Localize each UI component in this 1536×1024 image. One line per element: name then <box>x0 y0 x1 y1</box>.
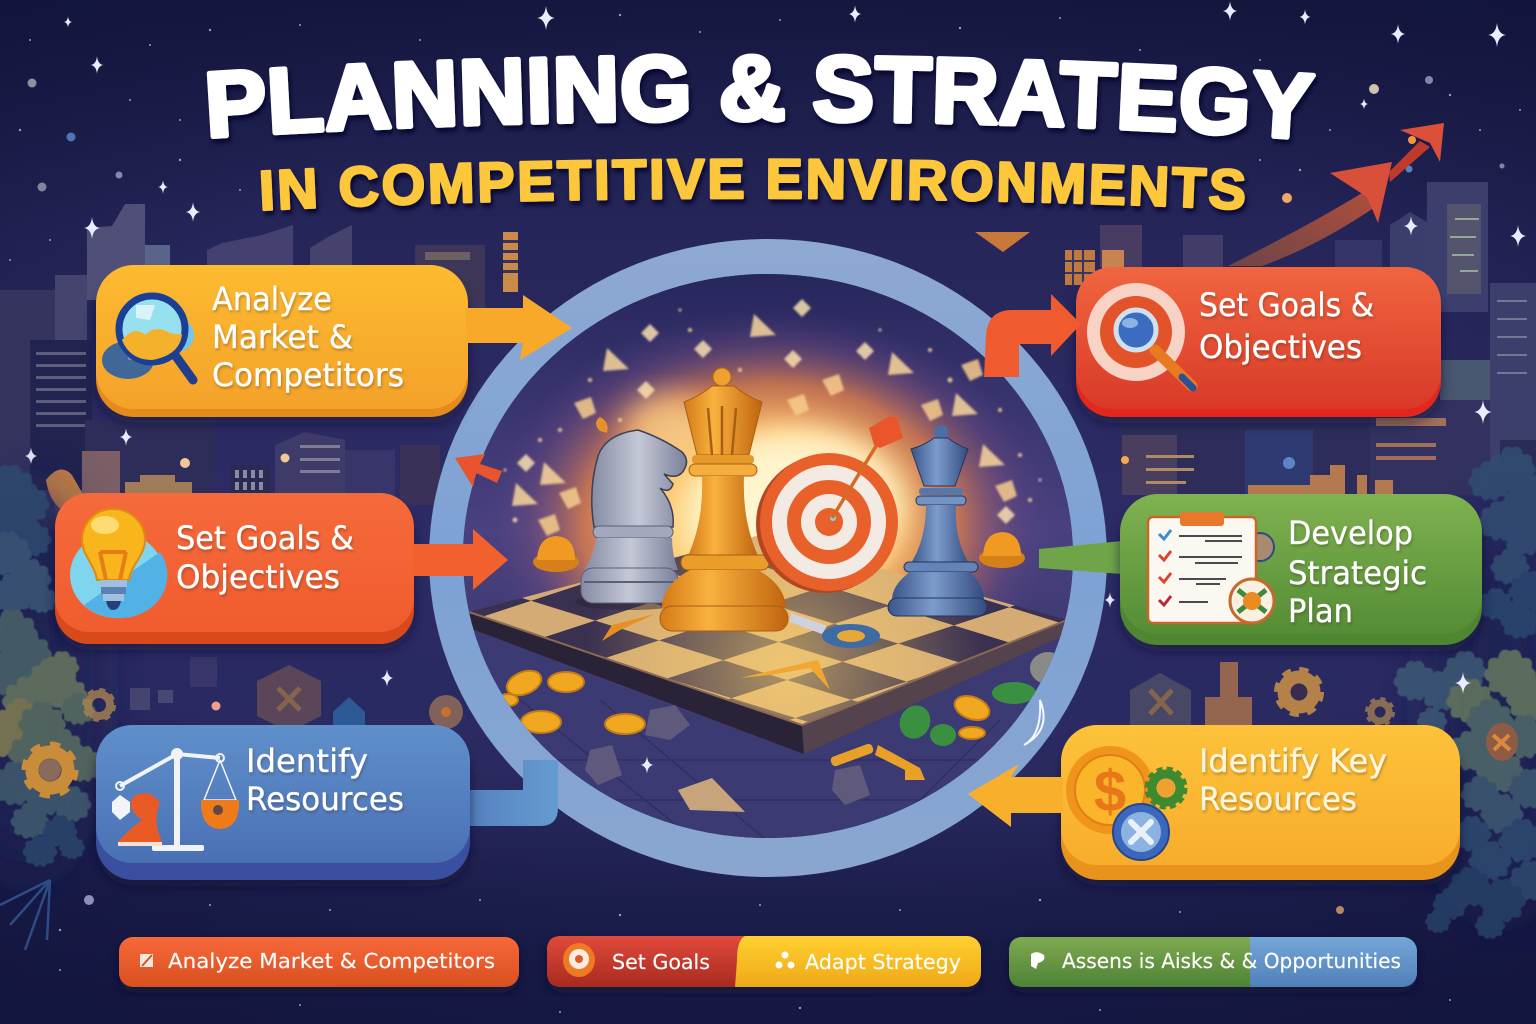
card text <box>1199 286 1374 366</box>
pill text: Assens is Aisks & & Opportunities <box>1062 949 1401 973</box>
board tokens <box>602 613 880 690</box>
foliage left <box>0 465 104 870</box>
icon: balance scales <box>112 748 239 851</box>
archery target <box>756 417 903 593</box>
card text: Plan <box>1288 592 1353 630</box>
title line one: PLANNING & STRATEGY <box>206 53 1318 145</box>
icon: coin with gear and badge: $ <box>1094 759 1126 824</box>
card text <box>176 519 354 596</box>
icon: magnifying glass <box>102 296 194 380</box>
floor below board <box>474 633 1059 838</box>
pill text: Analyze Market & Competitors <box>168 949 495 973</box>
card text <box>212 280 404 394</box>
icon: target with magnifier <box>1087 283 1193 388</box>
blue chess piece <box>888 425 987 616</box>
silver knight piece <box>575 417 687 610</box>
card text: Competitors <box>212 356 404 394</box>
card text: Set Goals & <box>176 519 354 557</box>
card text: Develop <box>1288 514 1413 552</box>
dome token right <box>979 532 1025 568</box>
card text: Resources <box>1199 780 1357 818</box>
card text: Resources <box>246 780 404 818</box>
decorative gears and hexagons <box>25 657 1518 795</box>
connector: plan to ring <box>1039 541 1122 574</box>
title <box>206 53 1318 216</box>
bottom pill: Assess Risks & Opportunities <box>1009 937 1417 987</box>
card text: Strategic <box>1288 554 1427 592</box>
star over right foliage <box>1455 672 1471 694</box>
gear left large <box>25 745 75 795</box>
card: Set Goals right <box>984 267 1441 417</box>
gear right small <box>1367 699 1393 725</box>
central scene <box>463 274 1073 838</box>
gear right large <box>1277 670 1321 714</box>
dome token left <box>533 536 579 572</box>
central ring <box>429 239 1107 877</box>
ring highlight swoosh <box>1024 700 1044 745</box>
gear left small <box>84 690 114 720</box>
backlight glow <box>510 322 1030 720</box>
card text <box>1199 742 1387 818</box>
icon: flag <box>1031 952 1044 969</box>
card text: Objectives <box>176 558 340 596</box>
pill text: Set Goals <box>612 950 710 974</box>
coins and debris <box>498 652 1066 812</box>
arrow: key resources to ring <box>968 764 1063 827</box>
icon: check box <box>140 954 153 967</box>
hexagon left <box>257 665 321 732</box>
pill text: Adapt Strategy <box>805 950 961 974</box>
hexagon right <box>1130 673 1191 735</box>
small red arrow on ring <box>455 454 502 487</box>
stepped block right <box>1205 662 1252 725</box>
card: Set Goals left <box>55 493 508 644</box>
city skyline <box>0 182 1536 720</box>
arrow: set goals to center <box>413 529 508 590</box>
card text: Analyze <box>212 280 332 318</box>
bottom pill: Set Goals and Adapt Strategy <box>547 936 981 987</box>
card text: Objectives <box>1199 328 1362 366</box>
arrow: ring to set goals <box>984 294 1081 377</box>
square blocks left <box>130 657 463 729</box>
card text: Identify Key <box>1199 742 1387 780</box>
card: Develop Strategic Plan <box>1039 494 1482 645</box>
icon: goal badge <box>563 943 595 977</box>
floating shards <box>504 299 1042 536</box>
connector: resources to ring <box>465 760 558 826</box>
card text: Set Goals & <box>1199 286 1374 324</box>
card text: Market & <box>212 318 353 356</box>
medal right <box>1486 723 1518 761</box>
card: Analyze Market & Competitors <box>96 265 572 417</box>
rising growth arrow <box>1228 123 1444 266</box>
icon: strategic checklist <box>1148 512 1274 623</box>
bottom pill: Analyze Market & Competitors <box>119 937 519 987</box>
card text <box>246 742 404 818</box>
leaf fronds lower left <box>0 880 50 950</box>
title line two: IN COMPETITIVE ENVIRONMENTS <box>260 158 1248 216</box>
icon: coin with gear and badge <box>1066 746 1185 860</box>
card text: Identify <box>246 742 368 780</box>
icon: light bulb <box>70 509 167 618</box>
foliage right <box>1393 447 1536 939</box>
gold king piece <box>660 368 788 631</box>
card text <box>1288 514 1427 630</box>
card: Identify Resources <box>96 725 558 880</box>
arrow: analyze to center <box>466 295 572 360</box>
icon: adapt nodes <box>776 952 794 968</box>
card: Identify Key Resources <box>968 725 1460 880</box>
chess board <box>469 535 1067 754</box>
